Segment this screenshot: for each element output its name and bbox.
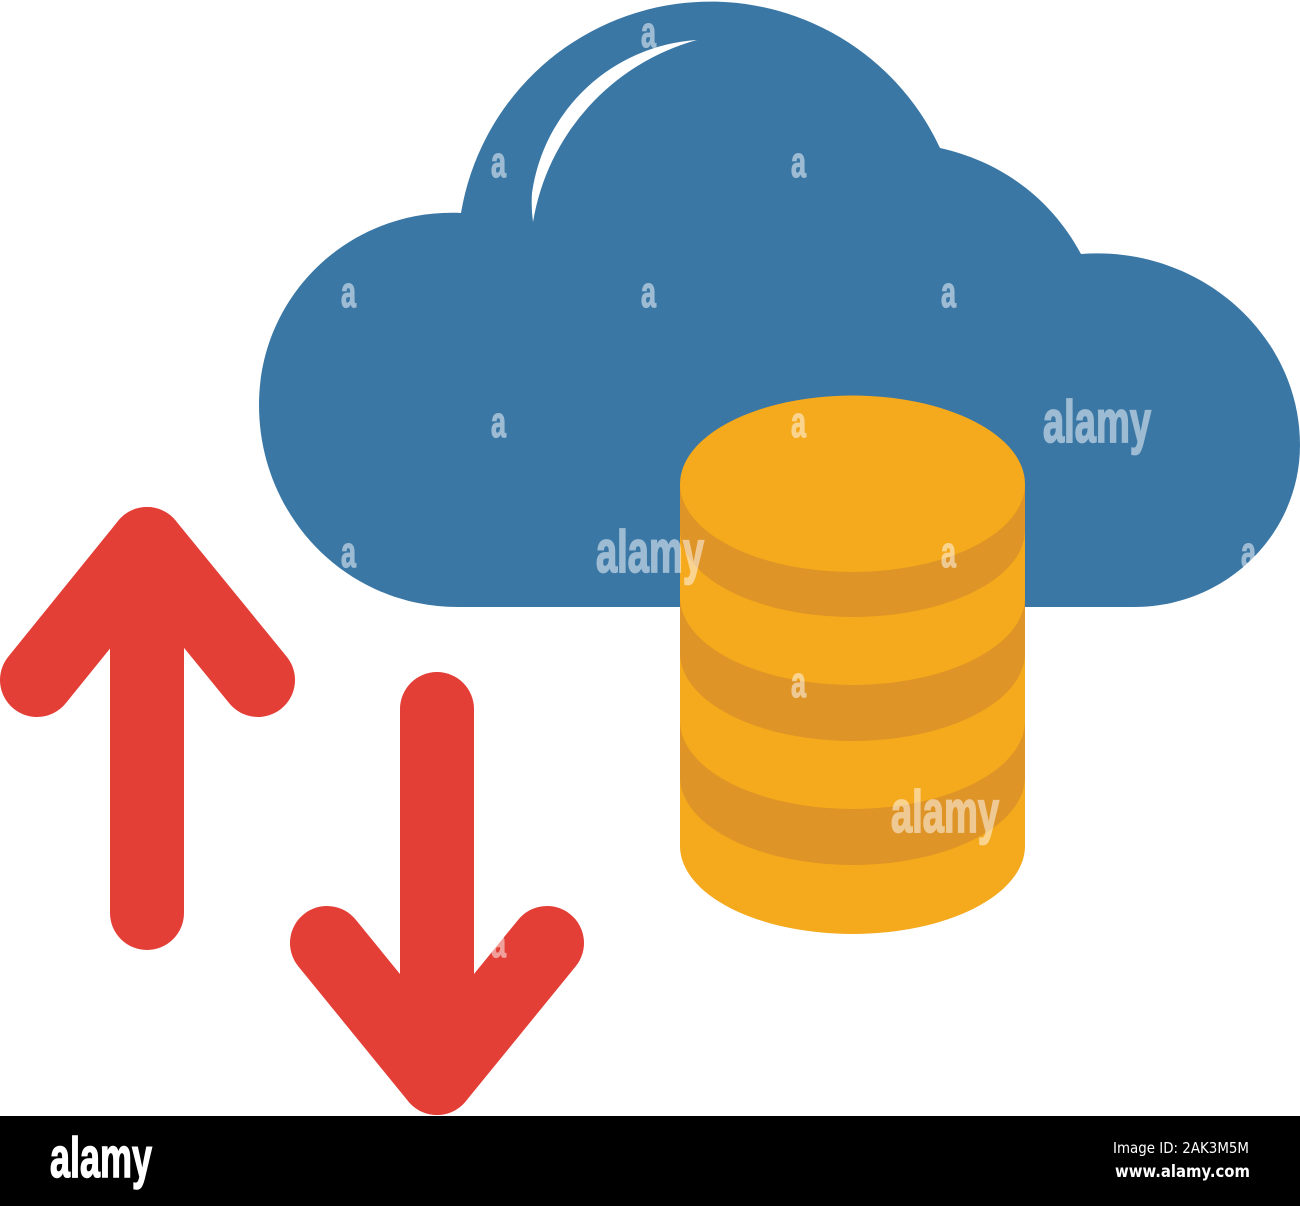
watermark: repeated alamy marks: alamy: [891, 779, 999, 845]
watermark: repeated alamy marks: a: [491, 398, 506, 447]
website: www.alamy.com: [1115, 1162, 1250, 1182]
watermark: repeated alamy marks: a: [791, 658, 806, 707]
image id: Image ID: 2AK3M5M: [1113, 1139, 1249, 1157]
icon: down arrow: [327, 709, 547, 1078]
watermark: repeated alamy marks: a: [341, 268, 356, 317]
icon: up arrow: [37, 544, 258, 913]
watermark: repeated alamy marks: a: [791, 398, 806, 447]
watermark: repeated alamy marks: alamy: [1043, 389, 1151, 455]
watermark: repeated alamy marks: a: [641, 268, 656, 317]
icon: database cylinder: [680, 396, 1025, 934]
watermark: repeated alamy marks: a: [341, 528, 356, 577]
watermark: repeated alamy marks: a: [641, 8, 656, 57]
watermark: repeated alamy marks: a: [941, 268, 956, 317]
icon: cloud: [259, 2, 1300, 607]
watermark: repeated alamy marks: alamy: [596, 519, 704, 585]
watermark: repeated alamy marks: [341, 8, 1256, 967]
icon: cloud highlight: [532, 40, 697, 222]
footer logo: alamy: [50, 1126, 152, 1190]
watermark: repeated alamy marks: a: [491, 138, 506, 187]
watermark: repeated alamy marks: a: [941, 528, 956, 577]
cylinder band 2: [680, 597, 1025, 741]
watermark: repeated alamy marks: a: [1241, 528, 1256, 577]
cylinder band 3: [680, 721, 1025, 865]
cylinder band 1: [680, 484, 1025, 617]
watermark: repeated alamy marks: a: [491, 918, 506, 967]
watermark: repeated alamy marks: a: [791, 138, 806, 187]
footer bar: [0, 1116, 1300, 1206]
